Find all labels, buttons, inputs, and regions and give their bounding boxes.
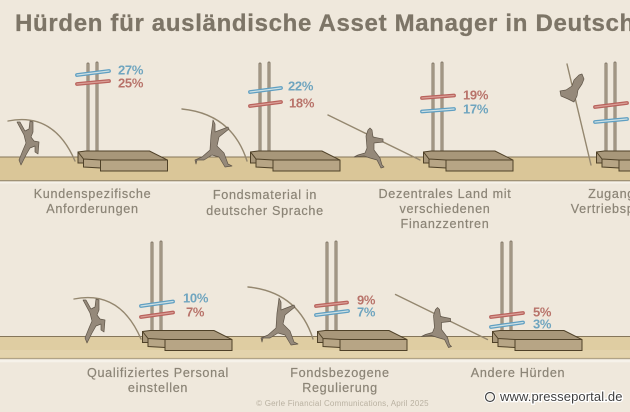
bar red bbox=[595, 103, 627, 107]
poles 5 bbox=[152, 242, 161, 334]
panel: Andere Hürden bbox=[396, 242, 582, 380]
bar red 25% bbox=[77, 81, 109, 84]
value 25%: 25% bbox=[118, 76, 144, 90]
label 2: deutscher Sprache bbox=[206, 204, 324, 218]
footer credit: © Gerle Financial Communications, April 2025 bbox=[256, 399, 429, 408]
panel: Fondsmaterial bbox=[182, 63, 340, 218]
value 5%: 5% bbox=[533, 304, 552, 320]
label 1: Kundenspezifische bbox=[34, 187, 151, 201]
mat 3 bbox=[424, 151, 513, 171]
poles 3 bbox=[433, 63, 442, 155]
poles 4 bbox=[606, 63, 615, 155]
bar blue 17% bbox=[422, 109, 454, 112]
bar blue 27% bbox=[77, 71, 109, 75]
mat 7 bbox=[492, 330, 582, 350]
label 5: Qualifiziertes Personal bbox=[87, 366, 229, 380]
bar red 5% bbox=[491, 313, 523, 317]
value 7%: 7% bbox=[186, 304, 205, 320]
watermark: presseportal bbox=[486, 389, 623, 404]
bar blue 3% bbox=[491, 322, 523, 327]
poles 1 bbox=[88, 63, 97, 155]
mat 4 bbox=[596, 151, 630, 171]
label 5: einstellen bbox=[128, 381, 188, 395]
ground: lower row bbox=[0, 336, 630, 362]
label 3: Finanzzentren bbox=[401, 217, 489, 231]
panel: Kundenspezifische Anforderungen bbox=[8, 62, 168, 216]
vaulter 6 bbox=[248, 287, 313, 345]
label 1: Anforderungen bbox=[46, 202, 139, 216]
panel: Dezentrales Land bbox=[328, 63, 513, 231]
label 3: Dezentrales Land mit bbox=[378, 187, 512, 201]
label 6: Fondsbezogene bbox=[290, 366, 390, 380]
mat 6 bbox=[318, 330, 407, 350]
value 19%: 19% bbox=[463, 88, 489, 102]
bar red 7% bbox=[141, 312, 173, 317]
bar blue 10% bbox=[141, 302, 173, 306]
vaulter 7 bbox=[396, 294, 488, 348]
icon: watermark circle inner bbox=[486, 392, 494, 402]
label 6: Regulierung bbox=[302, 381, 378, 395]
vaulter 1 bbox=[8, 120, 75, 165]
bar red 18% bbox=[250, 102, 281, 106]
mat 5 bbox=[142, 330, 232, 350]
label 7: Andere Hürden bbox=[471, 366, 565, 380]
value 9%: 9% bbox=[357, 292, 376, 308]
value 27%: 27% bbox=[118, 62, 144, 78]
mat 2 bbox=[250, 151, 340, 171]
panel: Zugang zu Vertriebspartnern bbox=[560, 63, 630, 216]
label 3: verschiedenen bbox=[399, 202, 491, 216]
vaulter 3 bbox=[328, 115, 420, 168]
vaulter 2 bbox=[182, 109, 247, 167]
ground: upper row bbox=[0, 156, 630, 183]
poles 2 bbox=[260, 63, 269, 155]
value 7%: 7% bbox=[357, 304, 376, 320]
vaulter 4 bbox=[560, 64, 591, 165]
bar blue 7% bbox=[316, 311, 348, 315]
value 10%: 10% bbox=[183, 290, 209, 306]
label 2: Fondsmaterial in bbox=[213, 188, 317, 202]
bar red 9% bbox=[316, 302, 347, 306]
value 3%: 3% bbox=[533, 316, 552, 332]
watermark text: www.presseportal.de bbox=[499, 389, 623, 404]
value 17%: 17% bbox=[463, 102, 489, 116]
bar blue bbox=[595, 119, 627, 122]
mat 1 bbox=[78, 151, 168, 171]
value 22%: 22% bbox=[288, 78, 314, 94]
icon: watermark circle bbox=[486, 392, 494, 402]
vaulter 5 bbox=[74, 298, 141, 343]
poles 7 bbox=[502, 242, 511, 334]
bar red 19% bbox=[422, 96, 454, 98]
panel: Qualifiziertes Personal bbox=[74, 242, 232, 395]
value 18%: 18% bbox=[289, 96, 315, 110]
bar blue 22% bbox=[250, 88, 281, 92]
poles 6 bbox=[327, 242, 336, 334]
panel: Fondsbezogene Regulierung bbox=[248, 242, 407, 395]
